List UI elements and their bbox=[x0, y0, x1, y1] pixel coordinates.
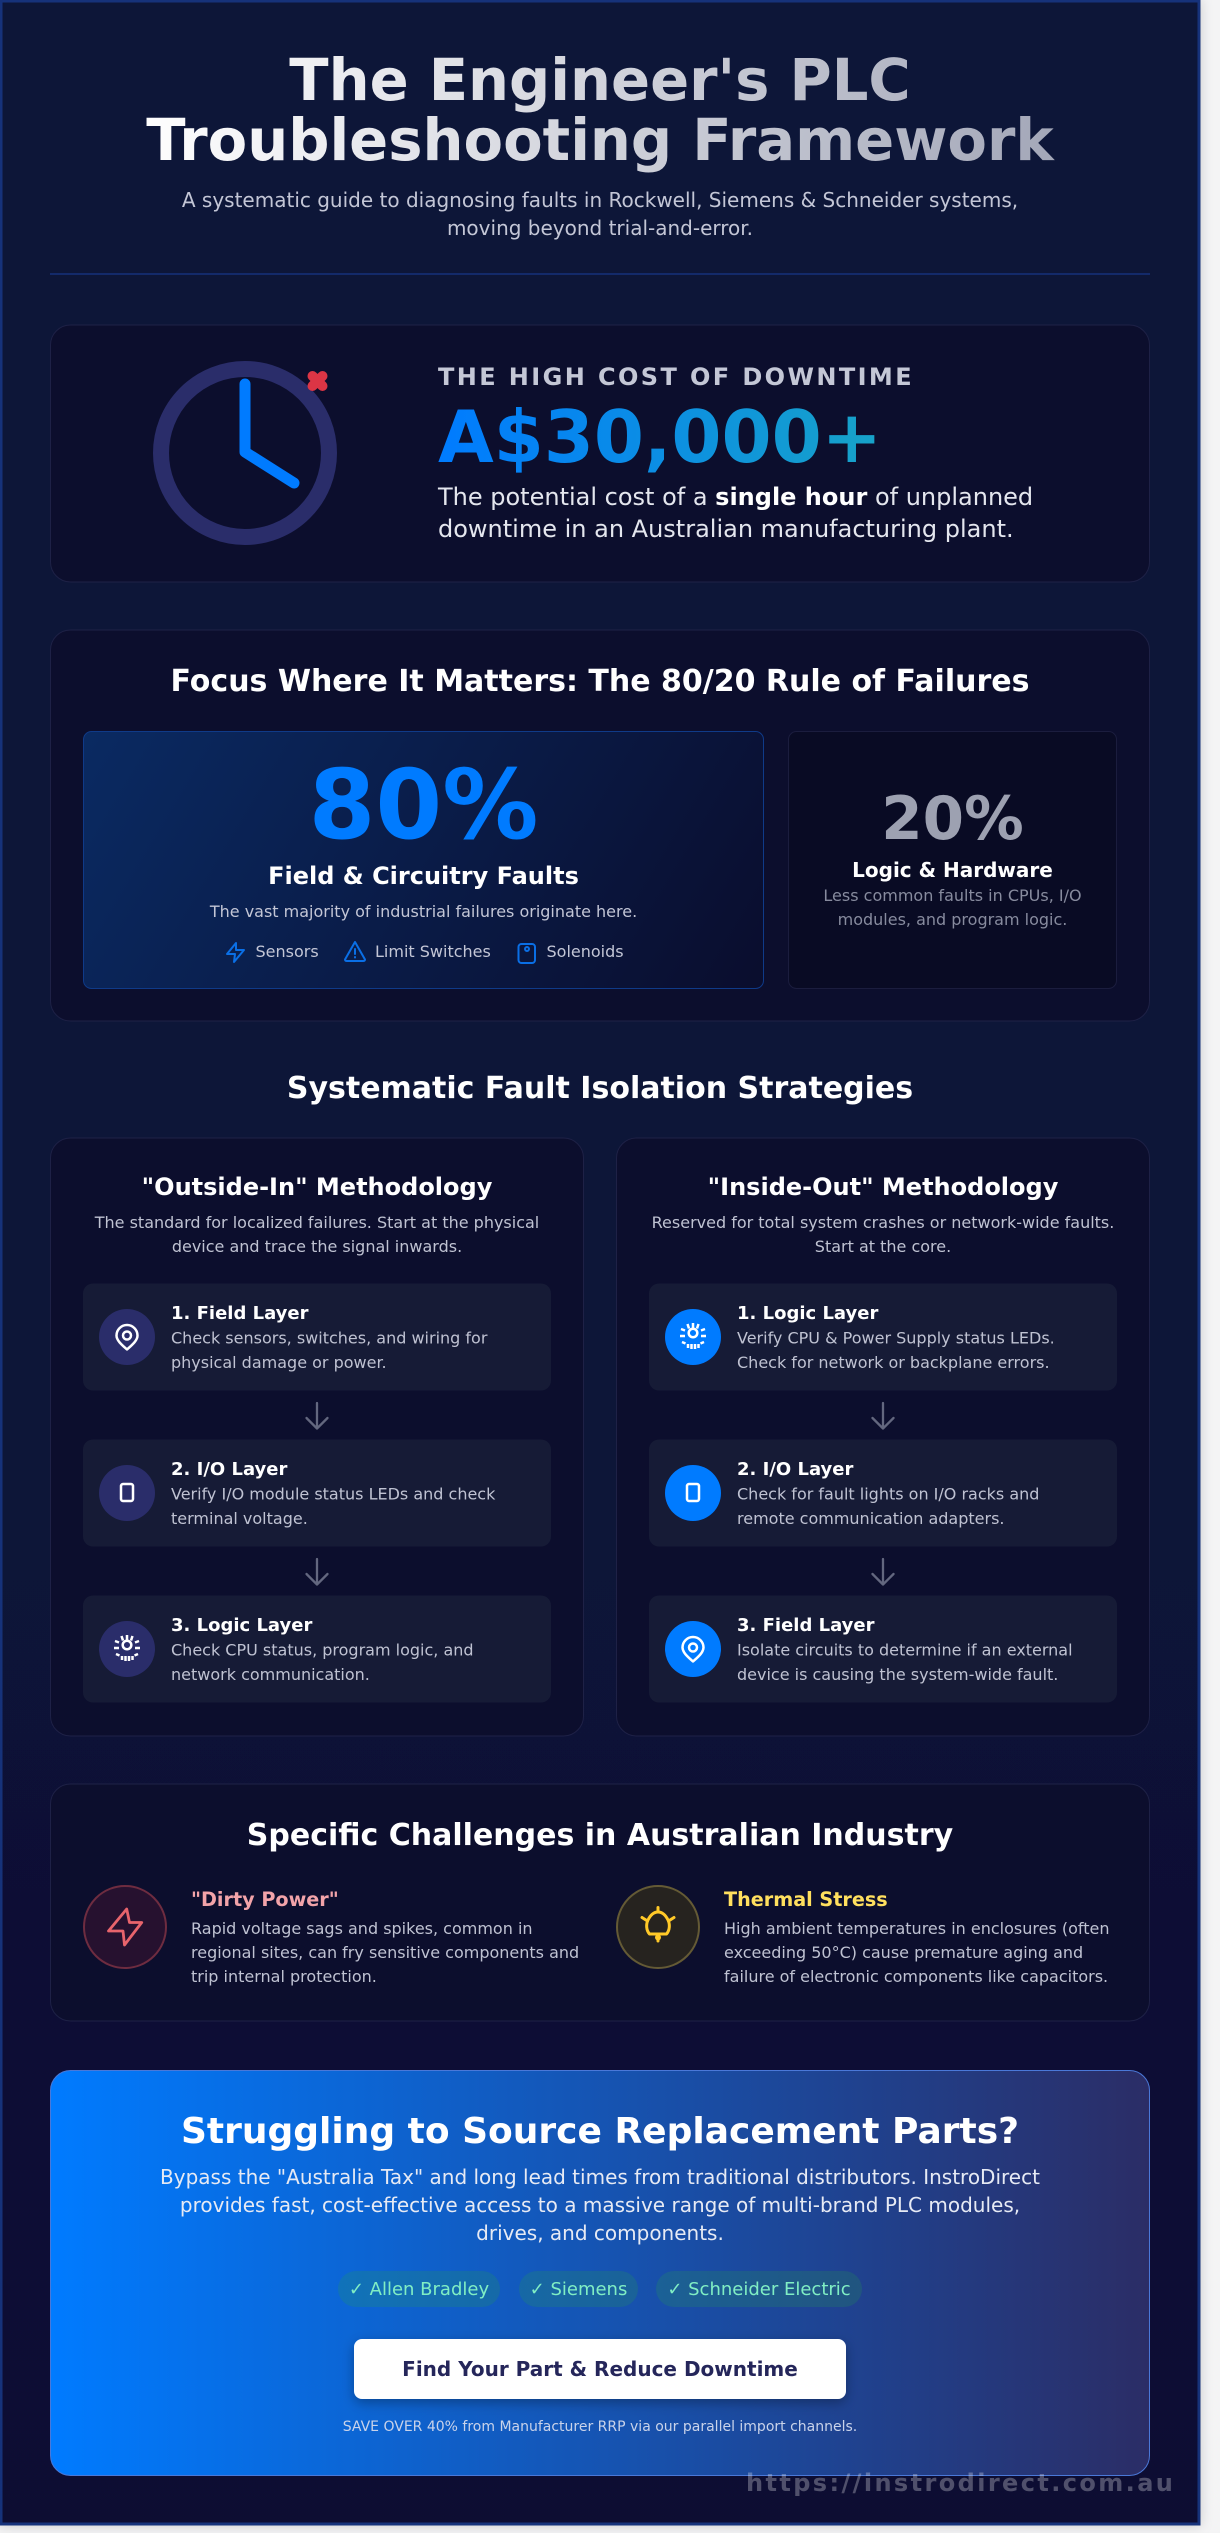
step 2: terminal voltage. bbox=[171, 1509, 308, 1528]
20 percent value: 20% bbox=[881, 785, 1024, 854]
challenge: dirty power: "Dirty Power" bbox=[191, 1888, 339, 1911]
icon: cpu status bbox=[680, 1323, 706, 1349]
step 1: Verify CPU & Power Supply status LEDs. bbox=[737, 1328, 1055, 1348]
panel: australian challenges bbox=[50, 1784, 1150, 2021]
panel description bbox=[652, 1213, 1114, 1256]
chip: allen bradley: ✓ Allen Bradley bbox=[349, 2279, 489, 2300]
icon: map pin bbox=[682, 1637, 704, 1662]
step 2: 2. I/O Layer bbox=[171, 1459, 287, 1480]
challenge: thermal stress: High ambient temperatures in enclosures (often bbox=[724, 1919, 1109, 1938]
step 2 bbox=[83, 1440, 551, 1546]
step 1: 1. Logic Layer bbox=[737, 1303, 878, 1324]
description: drives, and components. bbox=[476, 2221, 724, 2245]
heading: Struggling to Source Replacement Parts? bbox=[181, 2111, 1019, 2152]
panel description: device and trace the signal inwards. bbox=[172, 1237, 462, 1256]
button: Find Your Part & Reduce Downtime bbox=[402, 2357, 798, 2381]
panel: call to action bbox=[50, 2070, 1150, 2476]
panel description bbox=[94, 1213, 539, 1256]
step 2 bbox=[649, 1440, 1117, 1546]
title: The Engineer's PLC bbox=[289, 47, 911, 114]
step 1 bbox=[83, 1284, 551, 1390]
button bbox=[354, 2339, 846, 2399]
challenge: dirty power bbox=[84, 1886, 579, 1986]
stat value: A$30,000+ bbox=[438, 395, 882, 479]
header: title and subtitle bbox=[146, 47, 1055, 240]
title bbox=[146, 47, 1055, 174]
card heading: Field & Circuitry Faults bbox=[268, 862, 579, 890]
heading: fault isolation: Systematic Fault Isolation Strategies bbox=[287, 1071, 913, 1106]
step 3 bbox=[83, 1596, 551, 1702]
description: provides fast, cost-effective access to a massive range of multi-brand PLC modules, bbox=[180, 2193, 1020, 2217]
step 3: network communication. bbox=[171, 1665, 370, 1684]
step 2: Verify I/O module status LEDs and check bbox=[171, 1484, 496, 1504]
item: sensors: Sensors bbox=[256, 942, 319, 961]
brand chips bbox=[338, 2271, 862, 2307]
card description: The vast majority of industrial failures originate here. bbox=[209, 902, 637, 921]
card: 80 percent bbox=[84, 732, 764, 988]
chip: siemens bbox=[519, 2271, 638, 2307]
heading: Focus Where It Matters: The 80/20 Rule of Failures bbox=[171, 664, 1029, 699]
step 1: 1. Field Layer bbox=[171, 1303, 309, 1324]
step 1: Check sensors, switches, and wiring for bbox=[171, 1328, 488, 1348]
card description bbox=[823, 886, 1082, 929]
step 3: 3. Field Layer bbox=[737, 1615, 875, 1636]
challenge: dirty power: Rapid voltage sags and spikes, common in bbox=[191, 1919, 533, 1938]
arrow bbox=[306, 1559, 328, 1584]
subtitle: A systematic guide to diagnosing faults in Rockwell, Siemens & Schneider systems, bbox=[182, 188, 1018, 212]
panel heading: "Outside-In" Methodology bbox=[142, 1173, 493, 1201]
card description: modules, and program logic. bbox=[838, 910, 1067, 929]
step 3 bbox=[649, 1596, 1117, 1702]
step 3: Check CPU status, program logic, and bbox=[171, 1640, 474, 1660]
challenge: dirty power: trip internal protection. bbox=[191, 1967, 377, 1986]
step 2: 2. I/O Layer bbox=[737, 1459, 853, 1480]
item: solenoids bbox=[518, 942, 624, 963]
challenge: thermal stress: exceeding 50°C) cause premature aging and bbox=[724, 1943, 1083, 1962]
item: sensors bbox=[227, 942, 319, 962]
stat label: THE HIGH COST OF DOWNTIME bbox=[438, 363, 914, 391]
panel: outside-in methodology bbox=[50, 1138, 584, 1736]
panel: 80/20 rule bbox=[50, 630, 1150, 1021]
panel description: Start at the core. bbox=[815, 1237, 951, 1256]
challenge: thermal stress: failure of electronic components like capacitors. bbox=[724, 1967, 1108, 1986]
card heading: Logic & Hardware bbox=[852, 858, 1053, 882]
panel description: Reserved for total system crashes or network-wide faults. bbox=[652, 1213, 1114, 1232]
step 1 bbox=[649, 1284, 1117, 1390]
arrow bbox=[872, 1559, 894, 1584]
stat description: The potential cost of a single hour of unplanned bbox=[437, 483, 1033, 511]
panel: cost of downtime bbox=[50, 325, 1150, 582]
item: limit switches: Limit Switches bbox=[375, 942, 491, 961]
step 3: 3. Logic Layer bbox=[171, 1615, 312, 1636]
heading: Specific Challenges in Australian Industry bbox=[247, 1818, 954, 1853]
step 3: device is causing the system-wide fault. bbox=[737, 1665, 1058, 1684]
stat description: downtime in an Australian manufacturing plant. bbox=[438, 515, 1014, 543]
chip: siemens: ✓ Siemens bbox=[530, 2279, 627, 2300]
chip: schneider electric bbox=[656, 2271, 862, 2307]
chip: allen bradley bbox=[338, 2271, 500, 2307]
step 1: Check for network or backplane errors. bbox=[737, 1353, 1050, 1372]
icon: bolt bbox=[108, 1909, 142, 1945]
step 2: remote communication adapters. bbox=[737, 1509, 1005, 1528]
arrow bbox=[872, 1403, 894, 1428]
panel heading: "Inside-Out" Methodology bbox=[708, 1173, 1059, 1201]
description bbox=[160, 2165, 1040, 2245]
icon: cpu status bbox=[114, 1635, 140, 1661]
card: 20 percent bbox=[788, 732, 1116, 988]
step 1: physical damage or power. bbox=[171, 1353, 387, 1372]
item: solenoids: Solenoids bbox=[546, 942, 624, 961]
description: Bypass the "Australia Tax" and long lead times from traditional distributors. InstroDirect bbox=[160, 2165, 1040, 2189]
80 percent value: 80% bbox=[309, 749, 538, 861]
step 2: Check for fault lights on I/O racks and bbox=[737, 1484, 1039, 1504]
icon: io module bbox=[687, 1484, 699, 1501]
watermark: https://instrodirect.com.au bbox=[746, 2469, 1175, 2497]
arrow bbox=[306, 1403, 328, 1428]
title: Troubleshooting Framework bbox=[146, 107, 1055, 174]
panel description: The standard for localized failures. Start at the physical bbox=[94, 1213, 539, 1232]
subtitle bbox=[182, 188, 1018, 240]
challenge: thermal stress bbox=[617, 1886, 1109, 1986]
icon: thermal bbox=[642, 1908, 674, 1941]
chip: schneider electric: ✓ Schneider Electric bbox=[667, 2279, 851, 2300]
challenge: dirty power: regional sites, can fry sensitive components and bbox=[191, 1943, 579, 1962]
challenge: thermal stress: Thermal Stress bbox=[724, 1888, 888, 1911]
stat description bbox=[437, 483, 1033, 543]
footnote: SAVE OVER 40% from Manufacturer RRP via our parallel import channels. bbox=[343, 2419, 857, 2435]
icon: io module bbox=[121, 1484, 133, 1501]
panel: inside-out methodology bbox=[616, 1138, 1150, 1736]
card description: Less common faults in CPUs, I/O bbox=[823, 886, 1082, 905]
subtitle: moving beyond trial-and-error. bbox=[447, 216, 753, 240]
step 3: Isolate circuits to determine if an external bbox=[737, 1640, 1073, 1660]
icon: map pin bbox=[116, 1325, 138, 1350]
icon: clock with red fault mark bbox=[161, 369, 329, 537]
